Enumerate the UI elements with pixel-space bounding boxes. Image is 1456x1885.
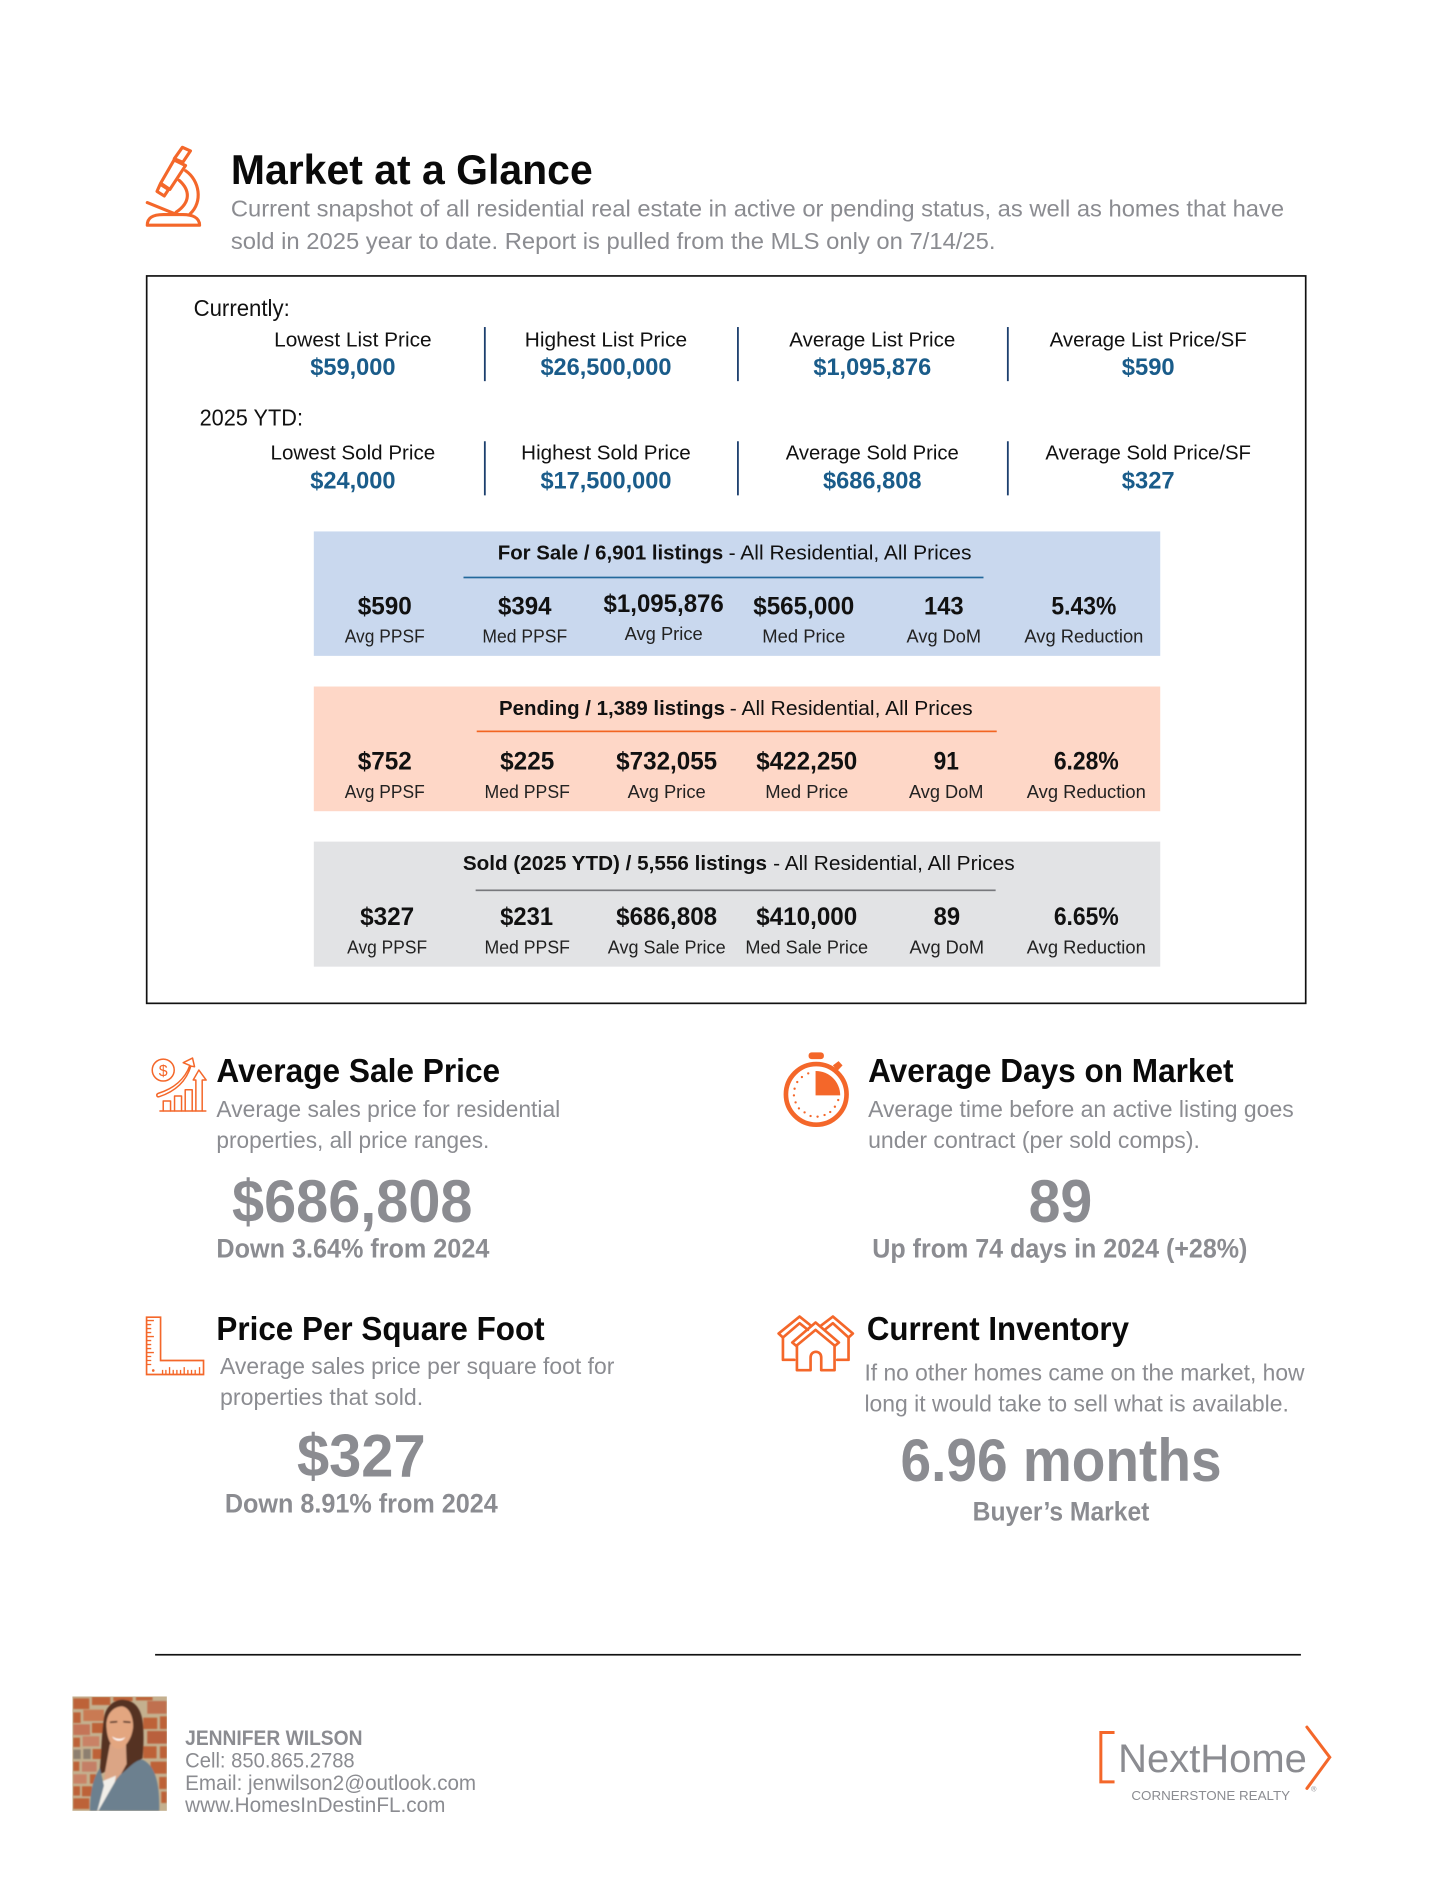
panel: pending: $225 — [500, 747, 554, 775]
panel: pending: Med PPSF — [485, 781, 570, 802]
panel: pending: - All Residential, All Prices — [730, 698, 973, 720]
stat row: 2025 sold prices: $686,808 — [823, 468, 922, 495]
icon: microscope — [147, 147, 200, 225]
stat: current inventory: Buyer’s Market — [973, 1496, 1150, 1526]
stat row: 2025 sold prices: Average Sold Price — [786, 442, 959, 464]
intro text: Current snapshot of all residential real estate in active or pending status, as well as homes that have — [231, 195, 1284, 221]
icon: rising price chart — [152, 1058, 206, 1111]
stat row: 2025 sold prices: $24,000 — [310, 468, 396, 495]
panel: for sale: For Sale / 6,901 listings — [498, 543, 723, 565]
agent contact details: www.HomesInDestinFL.com — [184, 1794, 445, 1817]
stat: average days on market: under contract (per sold comps). — [868, 1127, 1200, 1153]
stat row: 2025 sold prices: Lowest Sold Price — [271, 442, 435, 464]
stat: average days on market — [868, 1053, 1294, 1264]
panel: pending: 91 — [934, 747, 959, 775]
stat: price per square foot — [216, 1311, 615, 1519]
stat: current inventory — [864, 1311, 1305, 1526]
stat: average days on market: Average Days on Market — [868, 1053, 1234, 1090]
stat: price per square foot: Price Per Square Foot — [216, 1311, 545, 1348]
panel: for sale — [314, 531, 1160, 656]
panel: for sale: $565,000 — [753, 592, 854, 620]
panel: pending: Med Price — [765, 781, 848, 802]
panel: sold: $410,000 — [756, 903, 857, 931]
panel: for sale: 5.43% — [1051, 592, 1116, 620]
stat: current inventory: long it would take to sell what is available. — [864, 1391, 1289, 1417]
panel: for sale: Med PPSF — [482, 626, 567, 647]
panel: pending: $752 — [358, 747, 412, 775]
stat row: current list prices: $590 — [1122, 354, 1175, 381]
panel: market snapshot box — [147, 276, 1306, 1003]
panel: sold: Avg Reduction — [1027, 936, 1146, 957]
logo: NextHome Cornerstone Realty: ® — [1311, 1784, 1317, 1793]
panel: sold: Avg Sale Price — [608, 936, 726, 957]
logo: NextHome Cornerstone Realty: CORNERSTONE REALTY — [1131, 1788, 1290, 1803]
panel: sold — [314, 842, 1160, 967]
agent contact details: Cell: 850.865.2788 — [185, 1749, 355, 1772]
icon: houses — [779, 1317, 853, 1370]
stat row: 2025 sold prices: $17,500,000 — [540, 468, 671, 495]
panel: sold: Avg DoM — [910, 936, 984, 957]
stat: average days on market: Average time before an active listing goes — [868, 1096, 1294, 1122]
panel: sold: 89 — [934, 903, 960, 931]
panel: pending: Avg Price — [628, 781, 706, 802]
section label: 2025 YTD: 2025 YTD: — [200, 405, 303, 431]
stat row: current list prices: $59,000 — [310, 354, 396, 381]
stat: current inventory: If no other homes came on the market, how — [864, 1359, 1305, 1385]
stat: current inventory: Current Inventory — [867, 1311, 1129, 1348]
stat: price per square foot: $327 — [297, 1422, 426, 1489]
agent contact details: Email: jenwilson2@outlook.com — [185, 1772, 476, 1795]
stat: average sale price: $686,808 — [232, 1168, 473, 1235]
agent contact details: JENNIFER WILSON — [185, 1727, 362, 1750]
stat: average days on market: Up from 74 days in 2024 (+28%) — [872, 1234, 1247, 1264]
title: Market at a Glance — [231, 146, 593, 193]
panel: for sale: - All Residential, All Prices — [729, 543, 971, 565]
panel: sold: $327 — [360, 903, 414, 931]
panel: pending: $422,250 — [756, 747, 857, 775]
stat row: current list prices: $1,095,876 — [813, 354, 931, 381]
stat row: 2025 sold prices: $327 — [1122, 468, 1175, 495]
intro text: sold in 2025 year to date. Report is pulled from the MLS only on 7/14/25. — [231, 228, 996, 254]
panel: pending: 6.28% — [1054, 747, 1119, 775]
panel: sold: Sold (2025 YTD) / 5,556 listings — [463, 853, 767, 875]
stat: average sale price: properties, all price ranges. — [216, 1127, 489, 1153]
panel: sold: $686,808 — [616, 903, 717, 931]
panel: for sale: Med Price — [762, 626, 845, 647]
stat: price per square foot: Average sales price per square foot for — [220, 1353, 615, 1379]
stat row: 2025 sold prices — [271, 441, 1251, 495]
logo: NextHome Cornerstone Realty: NextHome — [1118, 1737, 1307, 1781]
stat: average sale price: Average Sale Price — [216, 1053, 500, 1090]
logo: NextHome Cornerstone Realty — [1101, 1727, 1330, 1803]
photo: agent portrait — [72, 1696, 167, 1811]
panel: sold: 6.65% — [1054, 903, 1119, 931]
stat: average days on market: 89 — [1029, 1168, 1092, 1235]
stat row: 2025 sold prices: Highest Sold Price — [521, 442, 691, 464]
panel: pending — [314, 687, 1160, 811]
stat: price per square foot: Down 8.91% from 2024 — [225, 1489, 498, 1519]
stat: current inventory: 6.96 months — [901, 1427, 1222, 1494]
icon: ruler square — [147, 1317, 204, 1375]
stat row: current list prices — [274, 327, 1247, 381]
panel: sold: Med Sale Price — [745, 936, 868, 957]
panel: sold: $231 — [500, 903, 553, 931]
stat row: current list prices: $26,500,000 — [540, 354, 671, 381]
stat row: current list prices: Average List Price/SF — [1050, 329, 1247, 351]
stat: price per square foot: properties that sold. — [220, 1384, 423, 1410]
stat row: current list prices: Highest List Price — [525, 329, 687, 351]
panel: pending: Avg Reduction — [1027, 781, 1146, 802]
panel: for sale: Avg DoM — [907, 626, 981, 647]
icon: stopwatch — [786, 1052, 847, 1125]
stat: average sale price — [216, 1053, 560, 1264]
icon: rising price chart: $ — [159, 1063, 168, 1080]
stat: average sale price: Average sales price for residential — [216, 1096, 560, 1122]
panel: for sale: Avg PPSF — [345, 626, 425, 647]
panel: for sale: $1,095,876 — [604, 590, 724, 618]
panel: sold: - All Residential, All Prices — [773, 853, 1015, 875]
panel: for sale: 143 — [924, 592, 964, 620]
panel: pending: Avg PPSF — [345, 781, 425, 802]
panel: sold: Med PPSF — [485, 936, 570, 957]
panel: for sale: $394 — [498, 592, 552, 620]
panel: for sale: Avg Price — [625, 623, 703, 644]
stat row: current list prices: Lowest List Price — [274, 329, 432, 351]
stat row: current list prices: Average List Price — [789, 329, 955, 351]
panel: pending: Avg DoM — [909, 781, 983, 802]
panel: pending: $732,055 — [616, 747, 717, 775]
panel: for sale: $590 — [358, 592, 412, 620]
stat: average sale price: Down 3.64% from 2024 — [216, 1234, 490, 1264]
intro text — [231, 195, 1284, 254]
section label: currently: Currently: — [194, 295, 290, 321]
panel: sold: Avg PPSF — [347, 936, 427, 957]
panel: pending: Pending / 1,389 listings — [499, 698, 725, 720]
stat row: 2025 sold prices: Average Sold Price/SF — [1045, 442, 1251, 464]
agent contact details — [184, 1727, 476, 1817]
panel: for sale: Avg Reduction — [1024, 626, 1143, 647]
